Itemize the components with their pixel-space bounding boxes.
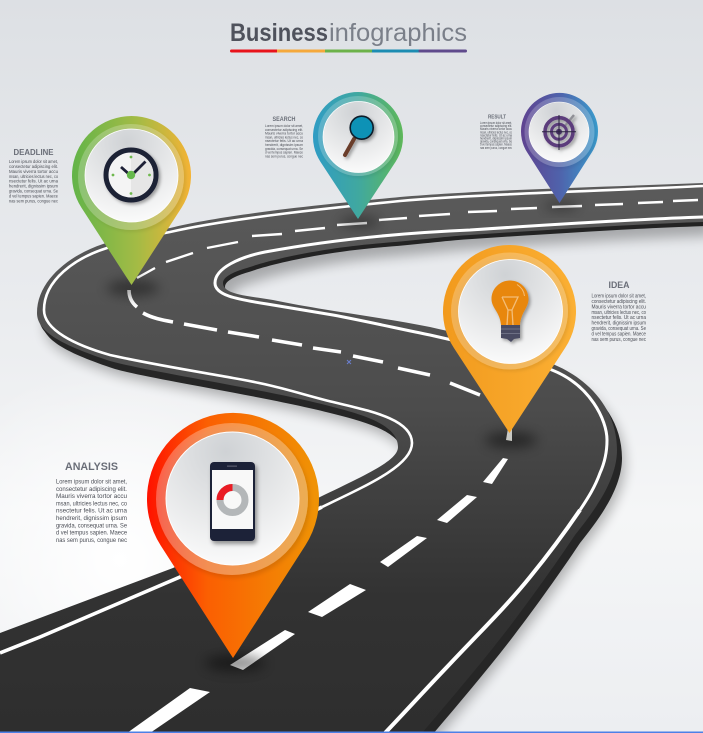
icon: smartphone with donut chart	[210, 462, 255, 541]
text: idea: hendrerit, dignissim ipsum	[592, 321, 646, 327]
text: idea: nsectetur felis. Ut ac urna	[592, 315, 646, 321]
text: idea: msan, ultricies lectus nec, co	[592, 310, 646, 316]
text: analysis: consectetur adipiscing elit.	[56, 486, 127, 493]
pin: deadline (green)	[72, 116, 191, 296]
text: search: d vel tempus sapien. Maece	[265, 151, 303, 155]
text: analysis: Lorem ipsum dolor sit amet,	[56, 478, 127, 486]
text: idea	[592, 280, 646, 343]
centre dashes: near section	[127, 458, 508, 733]
text: search: msan, ultricies lectus nec, co	[265, 135, 303, 139]
text: result: hendrerit, dignissim ipsum	[480, 136, 512, 140]
text: idea: IDEA	[608, 280, 630, 290]
text: search: nsectetur felis. Ut ac urna	[265, 139, 304, 143]
icon: clock	[106, 150, 156, 200]
text: analysis: d vel tempus sapien. Maece	[56, 530, 128, 537]
road	[0, 183, 703, 733]
text: result: nas sem purus, congue nec	[480, 146, 512, 150]
text: deadline: msan, ultricies lectus nec, co	[9, 174, 58, 179]
text: result: consectetur adipiscing elit.	[480, 124, 512, 128]
text: deadline: nsectetur felis. Ut ac urna	[9, 179, 58, 184]
bottom edge line	[0, 732, 703, 733]
text: analysis: Mauris viverra tortor accu	[56, 493, 128, 500]
text: analysis	[56, 461, 128, 544]
centre dashes: far section	[137, 200, 698, 278]
small blue mark	[347, 360, 351, 364]
icon: light bulb	[492, 280, 528, 342]
text: result: RESULT	[488, 114, 506, 120]
text: deadline: Mauris viverra tortor accu	[9, 169, 58, 174]
road outer edge line, near section	[0, 507, 322, 653]
text: search: hendrerit, dignissim ipsum	[265, 143, 303, 147]
icon: target	[542, 115, 576, 150]
title underline	[232, 50, 466, 52]
text: search: SEARCH	[272, 117, 296, 123]
pin: idea (orange)	[443, 245, 576, 448]
title	[230, 19, 467, 52]
text: deadline: nas sem purus, congue nec	[9, 198, 59, 203]
text: idea: consectetur adipiscing elit.	[592, 299, 646, 305]
text: deadline: d vel tempus sapien. Maece	[9, 193, 58, 198]
text: result: gravida, consequat urna. Se	[480, 140, 512, 144]
road inner edge line, near section	[385, 510, 580, 733]
text: deadline: hendrerit, dignissim ipsum	[9, 184, 58, 189]
text: deadline: gravida, consequat urna. Se	[9, 188, 58, 194]
text: idea: d vel tempus sapien. Maece	[592, 331, 646, 337]
text: idea: nas sem purus, congue nec	[592, 337, 646, 343]
text: deadline: consectetur adipiscing elit.	[9, 164, 58, 169]
text: idea: Lorem ipsum dolor sit amet,	[592, 294, 646, 300]
pin: analysis (red)	[147, 413, 319, 671]
title: Business	[230, 19, 328, 47]
text: deadline	[9, 148, 59, 203]
text: result: msan, ultricies lectus nec, co	[480, 130, 512, 134]
text: result: Mauris viverra tortor accu	[480, 127, 512, 131]
text: analysis: gravida, consequat urna. Se	[56, 522, 128, 529]
text: idea: Mauris viverra tortor accu	[592, 304, 646, 310]
road outer edge line	[44, 186, 703, 507]
title: infographics	[329, 19, 467, 47]
icon: magnifying glass	[345, 116, 373, 155]
text: search: gravida, consequat urna. Se	[265, 147, 303, 151]
text: analysis: hendrerit, dignissim ipsum	[56, 515, 127, 522]
text: search: Lorem ipsum dolor sit amet,	[265, 124, 303, 128]
text: analysis: nsectetur felis. Ut ac urna	[56, 508, 128, 515]
text: result	[480, 114, 512, 150]
text: deadline: DEADLINE	[14, 148, 54, 157]
pin: search (teal)	[313, 92, 403, 227]
text: result: d vel tempus sapien. Maece	[480, 143, 512, 147]
centre dashes: middle section	[129, 290, 480, 395]
text: search: Mauris viverra tortor accu	[265, 132, 303, 136]
pin: result (purple)	[521, 93, 598, 210]
text: idea: gravida, consequat urna. Se	[592, 326, 646, 332]
text: result: Lorem ipsum dolor sit amet,	[480, 121, 512, 125]
text: search: nas sem purus, congue nec	[265, 154, 303, 158]
text: deadline: Lorem ipsum dolor sit amet,	[9, 159, 58, 164]
text: search	[265, 117, 304, 158]
text: analysis: ANALYSIS	[65, 461, 118, 473]
text: analysis: nas sem purus, congue nec	[56, 537, 127, 544]
text: analysis: msan, ultricies lectus nec, co	[56, 500, 128, 507]
text: result: nsectetur felis. Ut ac urna	[480, 133, 512, 137]
road inner edge line	[215, 217, 703, 510]
text: search: consectetur adipiscing elit.	[265, 128, 303, 132]
